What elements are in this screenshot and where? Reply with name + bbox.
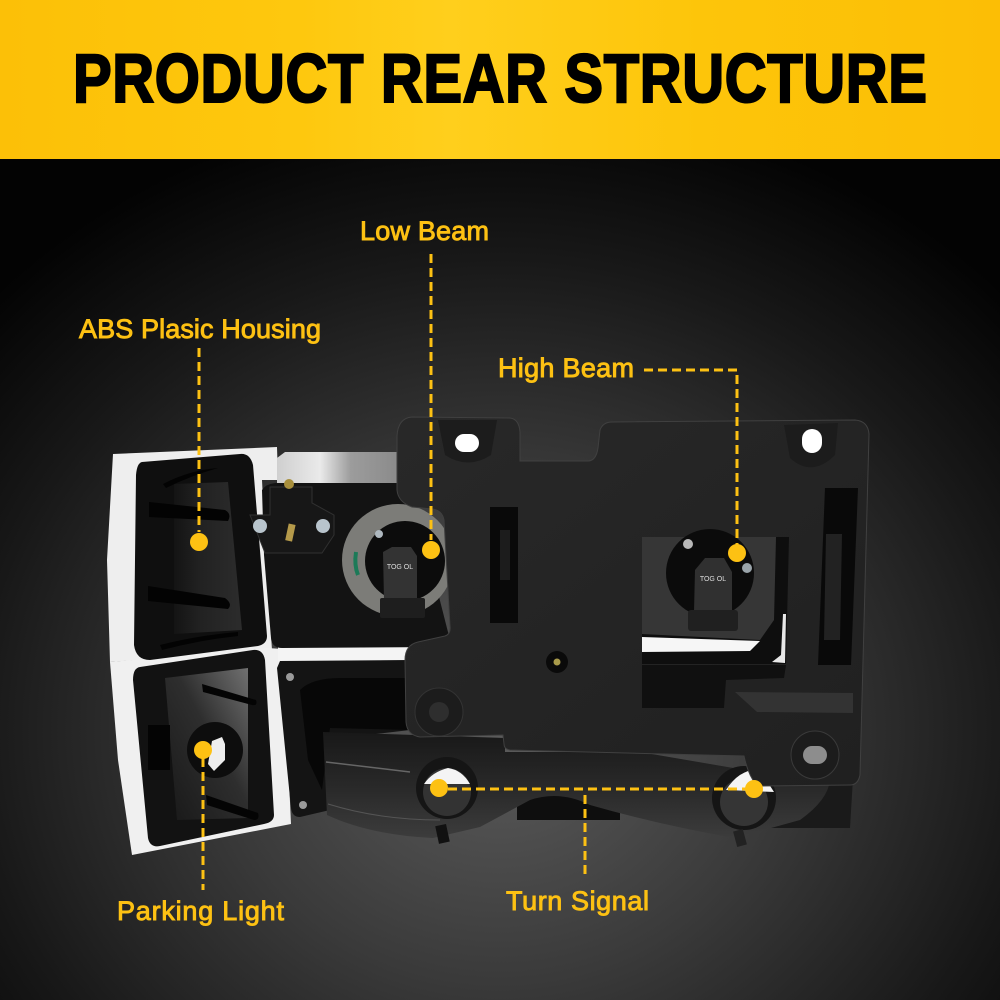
lower plate right	[517, 790, 620, 820]
callout: low beam	[360, 216, 489, 559]
high beam window	[642, 529, 789, 708]
lower housing plate	[277, 660, 410, 817]
right bracket round boss	[791, 731, 839, 779]
lower corner light body	[133, 650, 274, 846]
callout: high beam	[498, 353, 746, 562]
bracket center screw	[546, 651, 568, 673]
callout: ABS housing	[79, 314, 321, 551]
mounting bracket	[397, 417, 869, 786]
turn signal lens	[323, 732, 830, 838]
upper corner light body	[134, 454, 267, 660]
headlight assembly photo illustration	[107, 417, 869, 855]
low beam bulb	[342, 504, 454, 618]
white gap strip	[278, 646, 413, 662]
parking light socket	[187, 722, 243, 778]
callout: turn signal	[430, 779, 763, 916]
label: low beam: Low Beam	[360, 216, 489, 246]
label: high beam: High Beam	[498, 353, 634, 383]
bracket bevel	[735, 692, 853, 713]
header band	[0, 0, 1000, 159]
label: parking light: Parking Light	[117, 896, 284, 926]
left bracket mount hole	[438, 420, 497, 462]
plate inner recess	[300, 678, 410, 790]
label: turn signal: Turn Signal	[506, 886, 649, 916]
upper housing body	[262, 483, 450, 648]
top corner light: chrome edge	[107, 447, 278, 662]
label: ABS plastic housing: ABS Plasic Housing	[79, 314, 321, 344]
callout: parking light	[117, 741, 284, 926]
title: PRODUCT REAR STRUCTURE	[73, 42, 927, 117]
connector with screws	[250, 479, 334, 553]
upper corner light inner panel	[174, 482, 242, 634]
right bracket mount hole	[784, 423, 838, 467]
right turn socket	[712, 766, 776, 847]
high beam window: TOG OL	[700, 576, 726, 583]
plate screws	[286, 673, 307, 809]
left bracket slot	[490, 507, 518, 623]
lower corner light inner panel	[165, 668, 248, 820]
right bracket slot	[818, 488, 858, 665]
bottom corner light: chrome edge	[110, 648, 291, 855]
upper chrome housing	[277, 452, 400, 490]
left bracket round boss	[415, 688, 463, 736]
low beam bulb: TOG OL	[387, 564, 413, 571]
left turn socket	[416, 757, 478, 844]
